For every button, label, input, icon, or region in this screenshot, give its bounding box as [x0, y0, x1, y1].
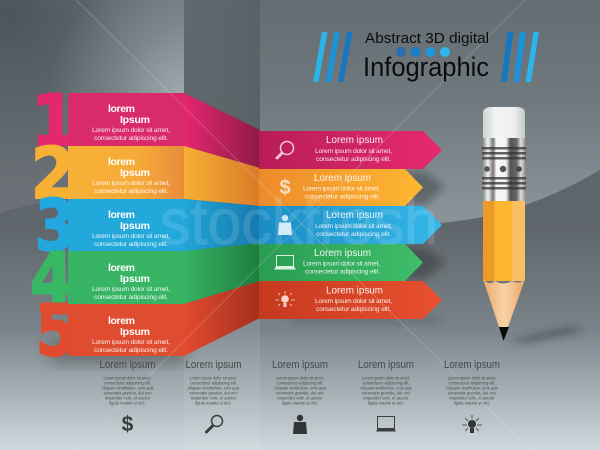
- number 3: 3: [35, 185, 75, 267]
- title line 2: Infographic: [363, 52, 489, 82]
- column 3: Lorem ipsum: [272, 359, 328, 371]
- column 4: Aliquam vestibulum, eros quis: [360, 386, 413, 390]
- right arrows: [259, 131, 442, 319]
- icon: dollar: $: [279, 177, 291, 199]
- column 2: Lorem ipsum dolor sit amet,: [190, 376, 238, 380]
- number 1: 1: [31, 80, 77, 162]
- icon: person: [293, 415, 307, 434]
- arrow: orange: Lorem ipsum dolor sit amet,: [303, 186, 380, 192]
- title block: [313, 30, 539, 82]
- column 4: [358, 359, 414, 432]
- text: ribbon 5: [92, 315, 170, 354]
- column 1: [100, 359, 156, 436]
- text: ribbon 5: Ipsum: [120, 326, 150, 338]
- icon: person: [278, 215, 292, 235]
- column 3: Lorem ipsum dolor sit amet,: [276, 376, 324, 380]
- lead: [499, 327, 509, 341]
- column 2: ligula mauris ut orci.: [196, 400, 232, 406]
- column 1: consectetur adipiscing elit.: [104, 380, 151, 386]
- column 3: Aliquam vestibulum, eros quis: [274, 386, 327, 390]
- column 2: Aliquam vestibulum, eros quis: [188, 386, 240, 390]
- column 2: Lorem ipsum: [186, 359, 242, 371]
- text: ribbon 4: [92, 262, 170, 301]
- column 2: venenatis gravida, dui orci: [190, 390, 238, 396]
- icon: laptop: [376, 416, 396, 432]
- text: ribbon 3: lorem: [108, 209, 135, 221]
- arrow: orange: consectetur adipiscing elit.: [305, 194, 380, 200]
- text: ribbon 2: consectetur adipiscing elit.: [94, 188, 168, 195]
- pencil body: [483, 201, 525, 281]
- column 5: [444, 359, 500, 433]
- text: ribbon 5: Lorem ipsum dolor sit amet,: [92, 339, 170, 346]
- red ribbon: [40, 281, 260, 356]
- column 3: ligula mauris ut orci.: [282, 400, 318, 406]
- dots: [396, 47, 450, 57]
- bottom columns: [100, 359, 500, 436]
- column 1: Lorem ipsum dolor sit amet,: [104, 376, 152, 380]
- left numbered ribbons: [30, 80, 260, 372]
- arrow: blue: consectetur adipiscing elit.: [316, 231, 391, 238]
- icon: dollar: $: [122, 413, 134, 436]
- arrow: orange: Lorem ipsum: [314, 172, 371, 184]
- column 5: Lorem ipsum dolor sit amet,: [448, 376, 496, 380]
- left slashes: [313, 32, 352, 82]
- arrow: green: Lorem ipsum: [314, 247, 371, 259]
- column 3: [272, 359, 328, 434]
- text: ribbon 3: Ipsum: [120, 220, 150, 232]
- column 5: Lorem ipsum: [444, 359, 500, 371]
- icon: light bulb: [462, 415, 482, 433]
- icon: light bulb: [275, 291, 295, 307]
- column 5: consectetur adipiscing elit.: [448, 380, 496, 386]
- text: ribbon 1: [92, 103, 170, 142]
- arrow: blue: [259, 206, 442, 244]
- column 1: venenatis gravida, dui orci: [104, 390, 152, 396]
- text: ribbon 3: [92, 209, 170, 248]
- pencil shadow: [508, 328, 585, 342]
- text: ribbon 4: Lorem ipsum dolor sit amet,: [92, 286, 170, 293]
- column 4: Lorem ipsum: [358, 359, 414, 371]
- number 4: 4: [30, 238, 74, 320]
- column 4: imperdiet velit, et auctor: [364, 396, 409, 400]
- text: ribbon 4: Ipsum: [120, 273, 150, 285]
- icon: magnifier: [206, 416, 222, 432]
- column 2: consectetur adipiscing elit.: [190, 380, 237, 386]
- arrow: red: Lorem ipsum: [326, 284, 383, 296]
- pink ribbon: [68, 93, 260, 168]
- orange ribbon: [68, 146, 260, 206]
- text: ribbon 1: Lorem ipsum dolor sit amet,: [92, 127, 170, 134]
- arrow: green: consectetur adipiscing elit.: [305, 268, 380, 276]
- column 3: imperdiet velit, et auctor: [278, 396, 323, 400]
- arrow: orange: [259, 169, 423, 206]
- title line 1: Abstract 3D digital: [365, 30, 489, 47]
- watermark lines: [75, 0, 530, 450]
- column 1: Lorem ipsum: [100, 359, 156, 371]
- watermark text: stockfresh: [160, 186, 438, 258]
- arrow: pink: consectetur adipiscing elit.: [316, 156, 391, 163]
- text: ribbon 1: consectetur adipiscing elit.: [94, 135, 168, 142]
- arrow: pink: Lorem ipsum dolor sit amet,: [315, 148, 392, 155]
- shadows: [50, 172, 445, 361]
- column 1: Aliquam vestibulum, eros quis: [102, 386, 154, 390]
- column 5: ligula mauris ut orci.: [454, 400, 490, 406]
- arrow: red: [259, 281, 442, 319]
- eraser: [483, 107, 525, 138]
- arrow: pink: Lorem ipsum: [326, 134, 383, 146]
- column 4: venenatis gravida, dui orci: [362, 390, 410, 396]
- text: ribbon 5: lorem: [108, 315, 135, 327]
- arrow: red: Lorem ipsum dolor sit amet,: [315, 298, 392, 305]
- arrow: blue: Lorem ipsum dolor sit amet,: [315, 223, 392, 230]
- column 1: ligula mauris ut orci.: [110, 400, 146, 406]
- column 3: consectetur adipiscing elit.: [276, 380, 324, 386]
- right slashes: [501, 32, 539, 82]
- column 5: venenatis gravida, dui orci: [448, 390, 496, 396]
- column 3: venenatis gravida, dui orci: [276, 390, 324, 396]
- column 5: imperdiet velit, et auctor: [450, 396, 495, 400]
- arrow: green: [259, 244, 423, 281]
- text: ribbon 4: lorem: [108, 262, 135, 274]
- text: ribbon 2: Ipsum: [120, 167, 150, 179]
- arrow: red: consectetur adipiscing elit.: [316, 306, 391, 313]
- column 2: imperdiet velit, et auctor: [191, 396, 236, 400]
- text: ribbon 4: consectetur adipiscing elit.: [94, 294, 168, 301]
- column 4: Lorem ipsum dolor sit amet,: [362, 376, 410, 380]
- column 2: [186, 359, 242, 432]
- arrow: pink: [259, 131, 442, 169]
- text: ribbon 2: Lorem ipsum dolor sit amet,: [92, 180, 170, 187]
- text: ribbon 3: consectetur adipiscing elit.: [94, 241, 168, 248]
- pencil: [482, 107, 585, 342]
- green ribbon: [68, 243, 260, 304]
- arrow: blue: Lorem ipsum: [326, 209, 383, 221]
- text: ribbon 5: consectetur adipiscing elit.: [94, 347, 168, 354]
- blue ribbon: [68, 199, 260, 251]
- text: ribbon 1: Ipsum: [120, 114, 150, 126]
- number 2: 2: [31, 133, 75, 215]
- text: ribbon 1: lorem: [108, 103, 135, 115]
- text: ribbon 2: lorem: [108, 156, 135, 168]
- icon: laptop: [274, 256, 296, 270]
- column 5: Aliquam vestibulum, eros quis: [446, 386, 499, 390]
- arrow: green: Lorem ipsum dolor sit amet,: [303, 260, 380, 268]
- column 4: consectetur adipiscing elit.: [362, 380, 410, 386]
- text: ribbon 2: [92, 156, 170, 195]
- icon: magnifier: [277, 142, 294, 158]
- metal ferrule: [482, 138, 526, 201]
- column 4: ligula mauris ut orci.: [368, 400, 404, 406]
- column 1: imperdiet velit, et auctor: [105, 396, 150, 400]
- text: ribbon 3: Lorem ipsum dolor sit amet,: [92, 233, 170, 240]
- number 5: 5: [36, 290, 76, 372]
- wood tip: [483, 279, 525, 327]
